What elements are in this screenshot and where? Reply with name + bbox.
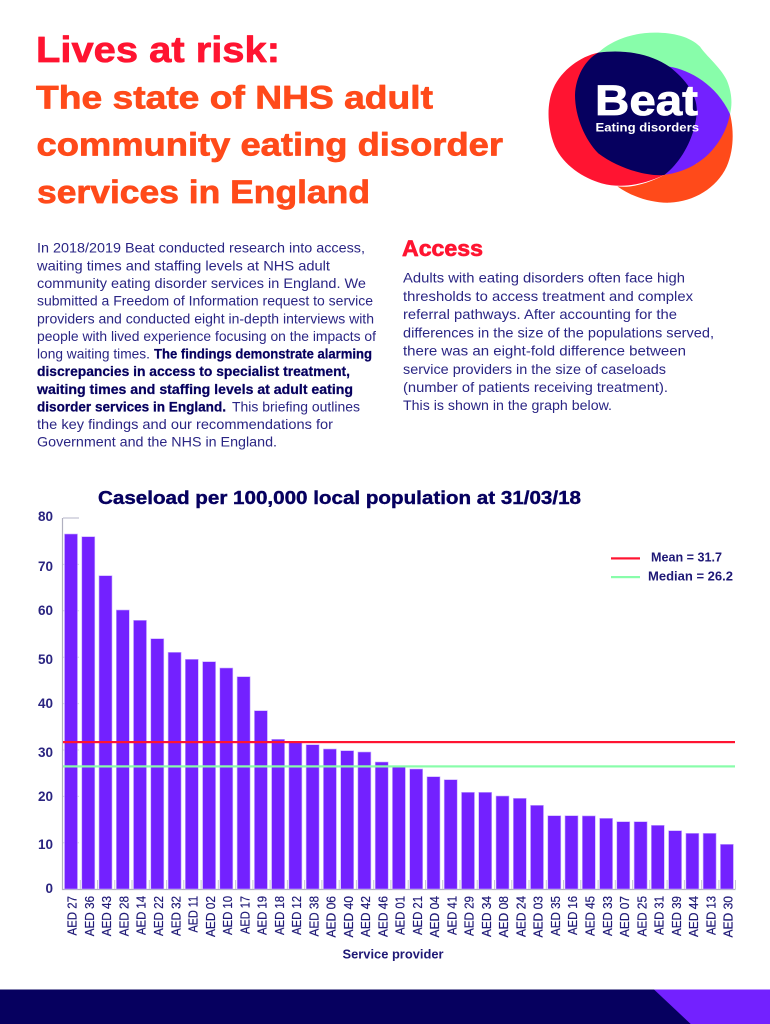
x axis labels: AED 10 xyxy=(220,896,235,935)
y axis labels: 30 xyxy=(38,745,53,760)
x axis labels: AED 28 xyxy=(116,896,132,936)
x axis labels: AED 13 xyxy=(703,896,718,935)
x axis labels: AED 43 xyxy=(99,896,114,936)
x axis labels: AED 32 xyxy=(168,896,183,936)
text block: access: This is shown in the graph below. xyxy=(403,397,612,413)
x axis labels: AED 46 xyxy=(375,896,390,937)
x axis labels: AED 21 xyxy=(410,896,425,935)
legend: Mean = 31.7 xyxy=(651,551,722,565)
x axis labels: AED 33 xyxy=(600,896,615,936)
x axis labels: AED 29 xyxy=(462,896,477,936)
x axis labels: AED 42 xyxy=(358,896,373,937)
x axis labels: AED 02 xyxy=(203,896,218,937)
median line xyxy=(63,765,735,768)
footer band xyxy=(0,990,770,1024)
x axis labels: AED 19 xyxy=(255,896,270,935)
legend: Median = 26.2 xyxy=(648,570,733,584)
x axis labels: AED 14 xyxy=(134,896,149,935)
y axis labels: 80 xyxy=(38,509,53,524)
y axis labels: 50 xyxy=(38,652,53,667)
logo strapline: Eating disorders xyxy=(596,122,699,134)
text block: access: service providers in the size of caseloads xyxy=(403,361,666,377)
x axis labels: AED 44 xyxy=(686,896,701,937)
x axis labels: AED 34 xyxy=(479,896,494,937)
text block: access: Adults with eating disorders often face high xyxy=(403,270,685,286)
title xyxy=(36,29,503,210)
logo wordmark: Beat xyxy=(595,77,698,125)
bars xyxy=(64,534,733,889)
x axis labels: AED 25 xyxy=(634,896,649,936)
heading: Access: Access xyxy=(402,236,483,261)
legend xyxy=(611,551,733,584)
title: Lives at risk: xyxy=(36,29,280,70)
text block: introduction: long waiting times. xyxy=(37,346,150,362)
x axis labels: AED 17 xyxy=(237,896,252,934)
x axis labels: AED 35 xyxy=(548,896,563,936)
text block: introduction: The findings demonstrate alarming xyxy=(154,346,372,362)
x axis labels: AED 06 xyxy=(324,896,339,938)
y axis labels: 0 xyxy=(45,881,53,896)
text block: introduction xyxy=(36,240,376,450)
x axis labels: AED 27 xyxy=(65,896,80,936)
text block: introduction: In 2018/2019 Beat conducted research into access, xyxy=(37,240,365,256)
x axis labels xyxy=(65,896,736,938)
text block: introduction: disorder services in England. xyxy=(37,398,226,414)
text block: access: thresholds to access treatment and complex xyxy=(403,288,693,304)
y axis labels: 40 xyxy=(38,696,53,711)
x axis labels: AED 08 xyxy=(496,896,511,938)
x axis labels: AED 39 xyxy=(669,896,684,936)
x axis labels: AED 07 xyxy=(617,896,632,937)
x axis labels: AED 24 xyxy=(514,896,528,937)
text block: access: (number of patients receiving treatment). xyxy=(403,379,668,395)
text block: introduction: waiting times and staffing levels at adult eating xyxy=(36,381,353,397)
text block: introduction: This briefing outlines xyxy=(232,398,360,414)
mean line xyxy=(63,741,735,743)
x axis labels: AED 31 xyxy=(652,896,666,935)
x axis labels: AED 22 xyxy=(151,896,166,936)
y axis labels: 10 xyxy=(38,837,53,852)
text block: introduction: discrepancies in access to specialist treatment, xyxy=(37,363,350,379)
title: community eating disorder xyxy=(36,126,503,162)
x axis labels: AED 30 xyxy=(721,896,736,938)
x axis labels: AED 12 xyxy=(289,896,304,935)
text block: introduction: waiting times and staffing levels at NHS adult xyxy=(36,257,330,273)
footer purple corner xyxy=(654,990,770,1024)
x axis labels: AED 11 xyxy=(186,896,200,932)
bar chart: caseload per provider xyxy=(38,509,736,938)
text block: introduction: the key findings and our recommendations for xyxy=(37,416,333,432)
x axis labels: AED 01 xyxy=(393,896,408,935)
text block: introduction: people with lived experience focusing on the impacts of xyxy=(37,328,376,344)
x axis labels: AED 16 xyxy=(565,896,580,935)
text block: introduction: submitted a Freedom of Information request to service xyxy=(37,293,373,309)
icon: Beat logo xyxy=(549,33,733,203)
text block: introduction: community eating disorder services in England. We xyxy=(37,275,366,291)
y axis labels xyxy=(38,509,53,896)
chart title: Caseload per 100,000 local population at 31/03/18 xyxy=(98,488,581,508)
x axis labels: AED 36 xyxy=(82,896,97,936)
x axis labels: AED 40 xyxy=(341,896,356,938)
text block: introduction: providers and conducted eight in-depth interviews with xyxy=(37,310,374,326)
x axis labels: AED 04 xyxy=(427,896,442,938)
text block: introduction: Government and the NHS in England. xyxy=(37,434,277,450)
y axis labels: 20 xyxy=(38,789,53,804)
text block: access: referral pathways. After accounting for the xyxy=(403,306,677,322)
x axis labels: AED 38 xyxy=(306,896,321,936)
x axis labels: AED 45 xyxy=(582,896,598,936)
x axis labels: AED 18 xyxy=(272,896,287,935)
title: services in England xyxy=(37,174,370,210)
x axis labels: AED 03 xyxy=(531,896,546,938)
y axis labels: 70 xyxy=(38,559,53,574)
text block: access: there was an eight-fold difference between xyxy=(403,342,686,358)
text block: access: differences in the size of the populations served, xyxy=(403,324,714,340)
x axis title: Service provider xyxy=(342,948,444,962)
title: The state of NHS adult xyxy=(36,80,433,116)
x axis labels: AED 41 xyxy=(444,896,459,935)
y axis labels: 60 xyxy=(38,603,53,618)
text block: access xyxy=(403,270,714,413)
